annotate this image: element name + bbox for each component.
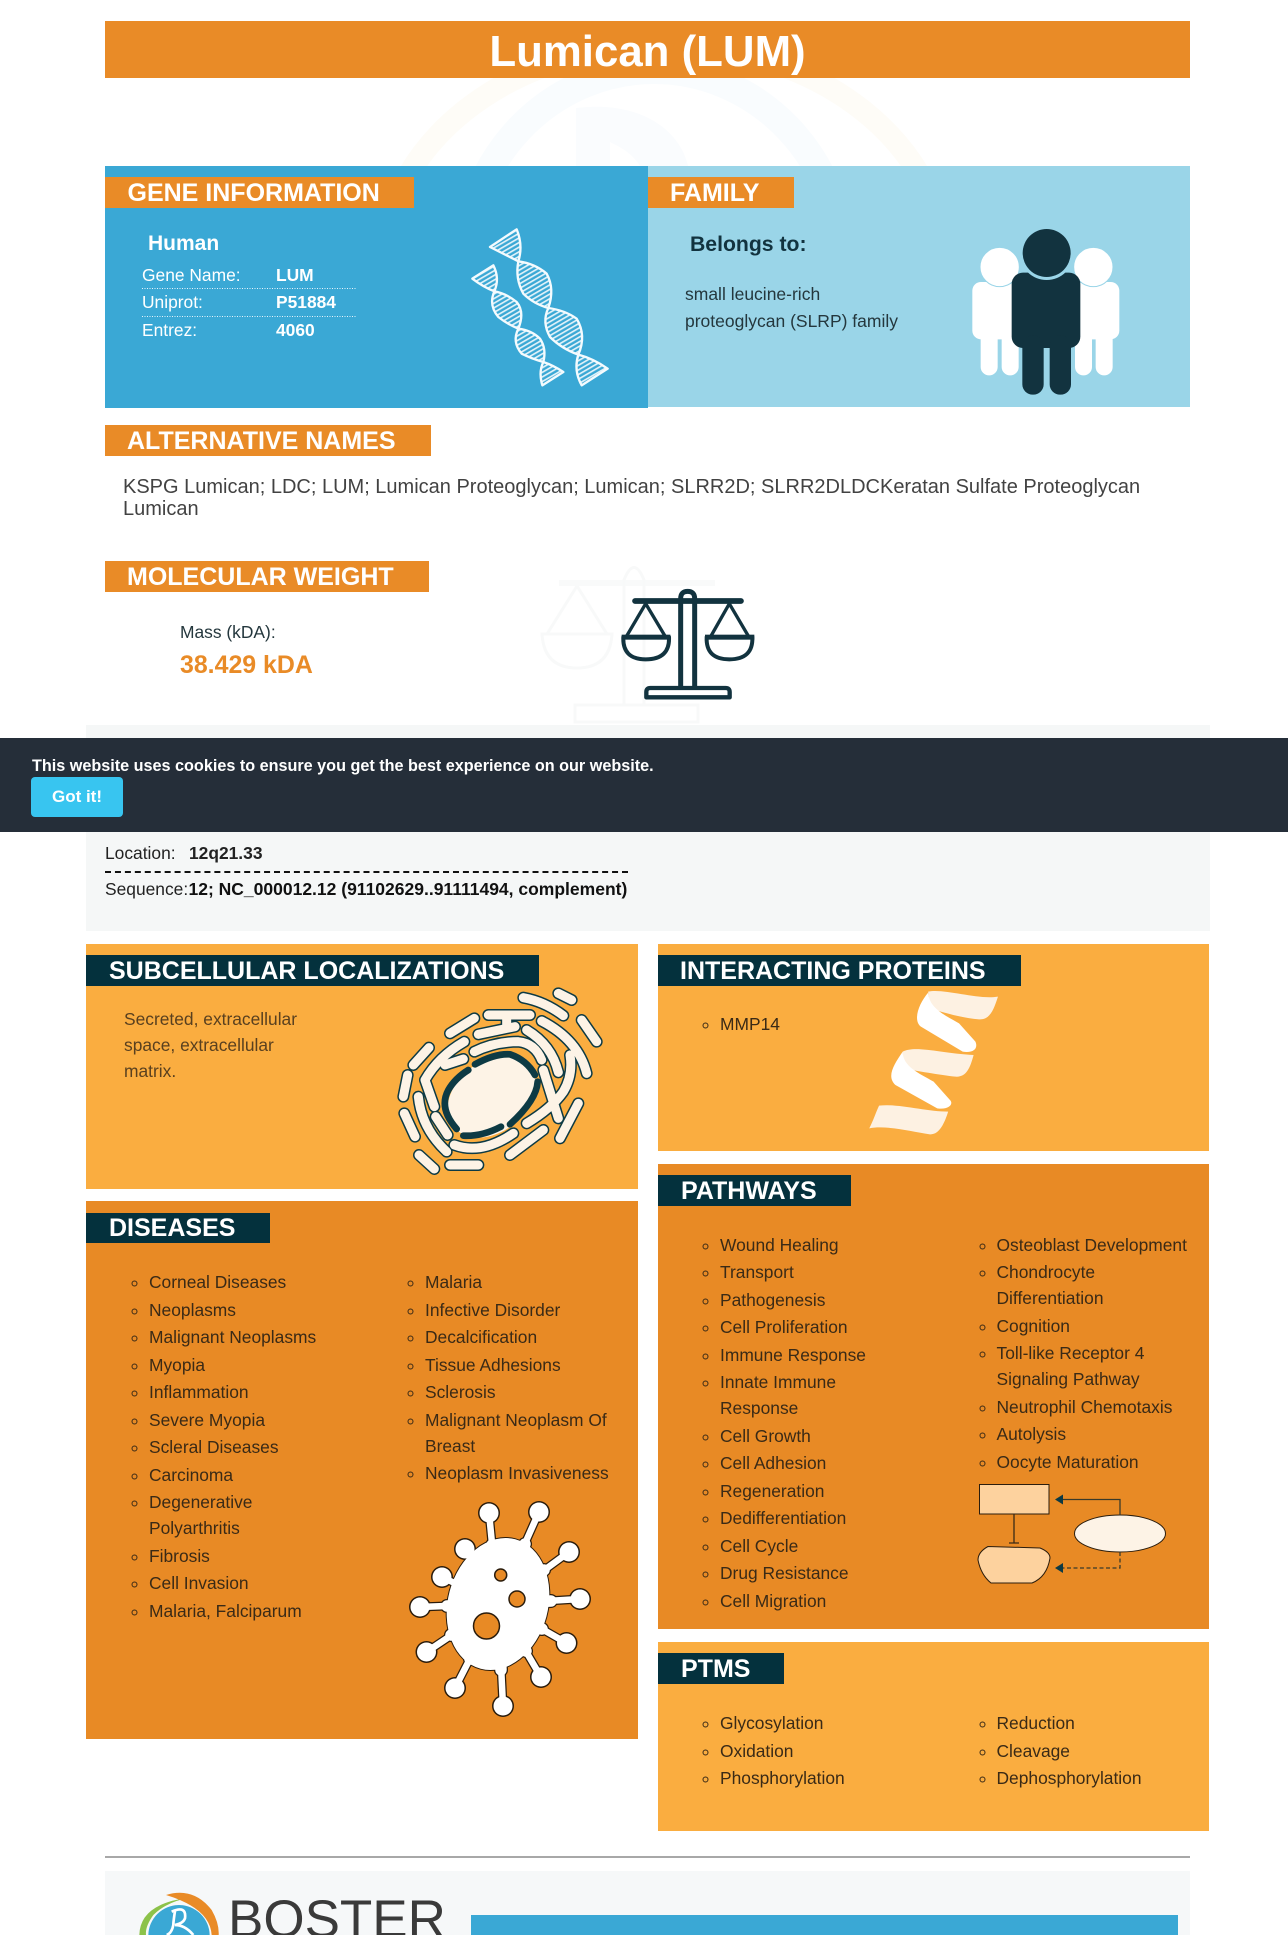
list: pathways column 2: Oocyte Maturation <box>996 1452 1139 1472</box>
list: pathways column 1: Cell Cycle <box>720 1536 798 1556</box>
footer divider <box>105 1856 1190 1858</box>
heading: family: FAMILY <box>670 179 759 207</box>
list: diseases column 2: Sclerosis <box>425 1382 496 1402</box>
text: location <box>105 843 262 863</box>
list: diseases column 1: Neoplasms <box>149 1300 236 1320</box>
list: diseases column 2: Neoplasm Invasiveness <box>425 1463 609 1483</box>
panel: pathways <box>658 1164 1209 1629</box>
list: diseases column 2: Decalcification <box>425 1327 537 1347</box>
text: sequence: 12; NC_000012.12 (91102629..91111494, complement) <box>188 879 627 899</box>
text: sequence: Sequence: <box>105 879 188 899</box>
heading: subcellular localizations: SUBCELLULAR LOCALIZATIONS <box>109 957 504 985</box>
watermark: faint logo background <box>340 78 1000 168</box>
heading: interacting proteins: INTERACTING PROTEINS <box>680 957 986 985</box>
list: PTMs column 1: Phosphorylation <box>720 1768 845 1788</box>
text: location: Location: <box>105 843 176 863</box>
cookie banner <box>0 738 1288 832</box>
list: diseases column 1: Malignant Neoplasms <box>149 1327 316 1347</box>
icon: virus <box>409 1501 591 1717</box>
title banner <box>105 21 1190 78</box>
list: PTMs column 2: Reduction <box>996 1713 1075 1733</box>
heading: gene information: GENE INFORMATION <box>128 179 380 207</box>
list: pathways column 1: Transport <box>720 1262 794 1282</box>
text: location: 12q21.33 <box>189 843 262 863</box>
panel: PTMs <box>658 1642 1209 1831</box>
panel: gene information <box>105 166 648 408</box>
list: pathways column 2: Osteoblast Development <box>996 1234 1187 1254</box>
button: got it: Got it! <box>52 787 102 806</box>
list: pathways column 1: Cell Adhesion <box>720 1453 826 1473</box>
gene fields table: Uniprot: <box>142 292 203 312</box>
heading: diseases: DISEASES <box>109 1214 235 1242</box>
gene fields table: P51884 <box>276 292 336 312</box>
panel: subcellular localizations <box>86 944 638 1189</box>
text: species: Human <box>148 232 219 255</box>
list: diseases column 1: Corneal Diseases <box>149 1272 286 1292</box>
list: pathways column 1: Innate Immune Response <box>720 1372 836 1418</box>
list: interacting proteins: MMP14 <box>720 1014 780 1034</box>
list: diseases column 1: Carcinoma <box>149 1464 233 1484</box>
heading: pathways: PATHWAYS <box>681 1177 817 1205</box>
list: PTMs column 2: Cleavage <box>996 1740 1070 1760</box>
list: diseases column 1: Cell Invasion <box>149 1573 249 1593</box>
panel: diseases <box>86 1201 638 1739</box>
list: diseases column 2 <box>408 1272 609 1483</box>
text: family name: small leucine-rich <box>685 284 820 304</box>
icon: balance scale <box>621 588 754 700</box>
icon: Boster logo <box>139 1892 219 1935</box>
panel: family <box>648 166 1190 407</box>
list: PTMs column 1: Oxidation <box>720 1740 793 1760</box>
list: diseases column 1: Myopia <box>149 1354 205 1374</box>
panel: footer <box>105 1871 1190 1935</box>
panel: chromosome location <box>86 725 1210 931</box>
text: localization <box>124 1009 297 1081</box>
text: sequence <box>105 871 628 899</box>
list: diseases column 1 <box>132 1272 316 1620</box>
icon: cell organelle <box>397 987 603 1175</box>
list: pathways column 1: Dedifferentiation <box>720 1508 846 1528</box>
text: mass value: 38.429 kDA <box>180 651 313 679</box>
list: diseases column 2: Malaria <box>425 1272 482 1292</box>
list: diseases column 1: Scleral Diseases <box>149 1437 279 1457</box>
text: alternative names: KSPG Lumican; LDC; LUM; Lumican Proteoglycan; Lumican; SLRR2D; SLRR2DLDCKeratan Sulfate Proteoglycan Lumican <box>123 476 1140 520</box>
list: diseases column 1: Inflammation <box>149 1382 249 1402</box>
title banner: Lumican (LUM) <box>489 27 806 76</box>
list: PTMs column 1 <box>702 1713 845 1788</box>
list: diseases column 1: Malaria, Falciparum <box>149 1600 302 1620</box>
list: diseases column 1: Severe Myopia <box>149 1410 265 1430</box>
icon: protein helix ribbon <box>869 991 998 1134</box>
heading: PTMs: PTMS <box>681 1655 750 1683</box>
heading: molecular weight: MOLECULAR WEIGHT <box>127 563 394 591</box>
text: family name <box>685 284 898 331</box>
text: family name: proteoglycan (SLRP) family <box>685 311 898 331</box>
list: PTMs column 2: Dephosphorylation <box>996 1768 1142 1788</box>
text: belongs to: Belongs to: <box>690 233 807 256</box>
list: pathways column 2: Autolysis <box>996 1424 1066 1444</box>
cookie message: This website uses cookies to ensure you get the best experience on our website. <box>32 757 654 775</box>
heading: diseases <box>86 1213 270 1243</box>
list: pathways column 2 <box>980 1234 1187 1472</box>
list: pathways column 2: Neutrophil Chemotaxis <box>996 1396 1172 1416</box>
panel: interacting proteins <box>658 944 1209 1151</box>
list: pathways column 2: Chondrocyte Differentiation <box>996 1262 1104 1308</box>
gene fields table: Entrez: <box>142 320 197 340</box>
list: PTMs column 2 <box>980 1713 1142 1788</box>
text: localization: space, extracellular <box>124 1035 274 1055</box>
button: got it <box>31 777 123 817</box>
gene fields table: Gene Name: <box>142 265 241 285</box>
gene fields table: LUM <box>276 265 314 285</box>
list: pathways column 2: Toll-like Receptor 4 Signaling Pathway <box>996 1343 1144 1389</box>
footer blue bar <box>471 1915 1178 1935</box>
gene fields table: 4060 <box>276 320 315 340</box>
diagram: signalling schematic <box>978 1484 1166 1584</box>
icon: family of people <box>972 229 1120 395</box>
text: localization: matrix. <box>124 1061 176 1081</box>
icon: DNA helices <box>471 228 609 386</box>
list: diseases column 1: Degenerative Polyarthritis <box>149 1492 252 1538</box>
text: mass label: Mass (kDA): <box>180 622 276 642</box>
list: diseases column 1: Fibrosis <box>149 1546 210 1566</box>
list: PTMs column 1: Glycosylation <box>720 1713 823 1733</box>
heading: family <box>648 177 794 208</box>
icon: ghost scale watermark <box>535 560 725 730</box>
list: pathways column 1: Immune Response <box>720 1344 866 1364</box>
heading: alternative names: ALTERNATIVE NAMES <box>127 427 396 455</box>
list: pathways column 1: Cell Migration <box>720 1590 826 1610</box>
list: diseases column 2: Tissue Adhesions <box>425 1354 561 1374</box>
list: diseases column 2: Malignant Neoplasm Of Breast <box>425 1410 607 1456</box>
heading: pathways <box>658 1175 851 1206</box>
list: pathways column 1: Wound Healing <box>720 1234 839 1254</box>
list: pathways column 2: Cognition <box>996 1316 1070 1336</box>
gene fields table <box>142 265 356 340</box>
list: diseases column 2: Infective Disorder <box>425 1300 560 1320</box>
list: pathways column 1: Cell Proliferation <box>720 1317 848 1337</box>
list: pathways column 1 <box>702 1234 866 1610</box>
list: pathways column 1: Pathogenesis <box>720 1290 825 1310</box>
list: pathways column 1: Drug Resistance <box>720 1563 849 1583</box>
text: localization: Secreted, extracellular <box>124 1009 297 1029</box>
list: pathways column 1: Cell Growth <box>720 1426 811 1446</box>
list: pathways column 1: Regeneration <box>720 1480 824 1500</box>
heading: PTMs <box>658 1653 784 1684</box>
